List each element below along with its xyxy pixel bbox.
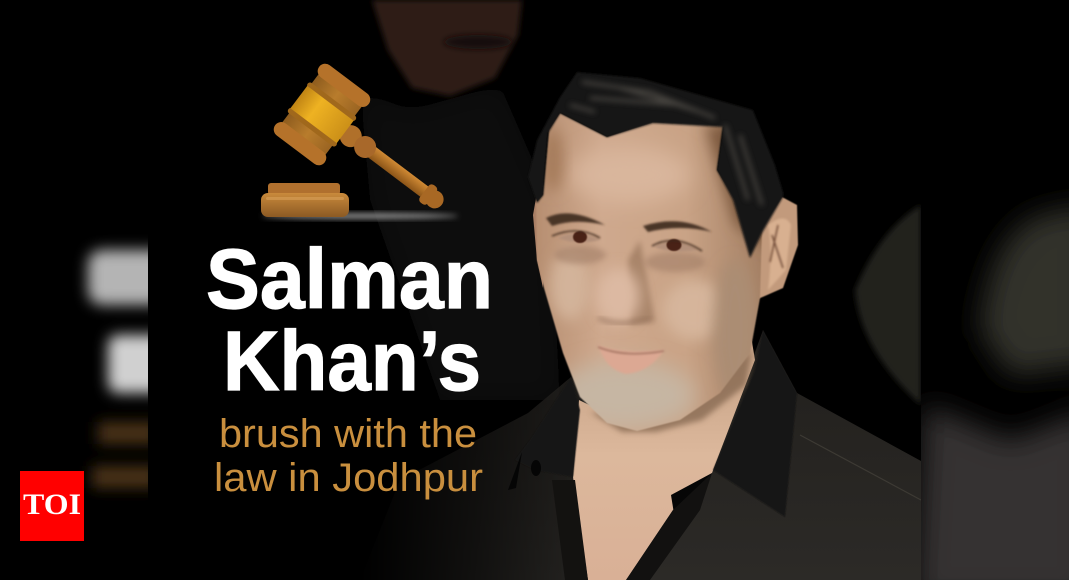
- title: Salman Khan's: Khan’s: [223, 314, 481, 408]
- panel: blurred right strip: [915, 205, 1069, 580]
- title: Salman Khan's: Salman: [206, 232, 493, 326]
- collar left: [557, 396, 581, 478]
- lips: [600, 349, 662, 374]
- subtitle: brush with the: [219, 412, 477, 456]
- collar right: [713, 330, 797, 517]
- ear: [758, 197, 798, 299]
- logo: TOI: TOI: [23, 488, 81, 521]
- eyes: [552, 231, 702, 251]
- gavel head and handle: [271, 61, 468, 240]
- shirt: [416, 330, 921, 580]
- eyebrows: [546, 213, 605, 226]
- hair: [528, 72, 784, 258]
- panel: central photo of Salman Khan: [363, 0, 921, 580]
- background bodyguard: [360, 0, 560, 400]
- subtitle: [214, 412, 483, 500]
- cheek lower grey: [555, 361, 695, 429]
- forehead highlight: [570, 147, 690, 203]
- nose shade: [628, 240, 655, 325]
- temple shade: [705, 125, 770, 250]
- neck: [573, 330, 755, 580]
- subtitle: law in Jodhpur: [214, 456, 483, 500]
- forehead left shade: [543, 128, 563, 192]
- panel: blurred left strip: [88, 250, 168, 488]
- icon: gavel: [261, 61, 468, 240]
- background figure shoulder: [855, 205, 921, 405]
- right shoulder seam: [800, 435, 921, 500]
- title: Salman Khan's: [206, 232, 493, 408]
- face: [536, 113, 762, 432]
- left ear sliver: [533, 198, 544, 288]
- logo: TOI: [20, 471, 84, 541]
- gavel stand shadow: [262, 213, 458, 219]
- nose: [596, 268, 640, 324]
- under-eye shade: [554, 246, 606, 264]
- gavel sounding block: [261, 183, 349, 217]
